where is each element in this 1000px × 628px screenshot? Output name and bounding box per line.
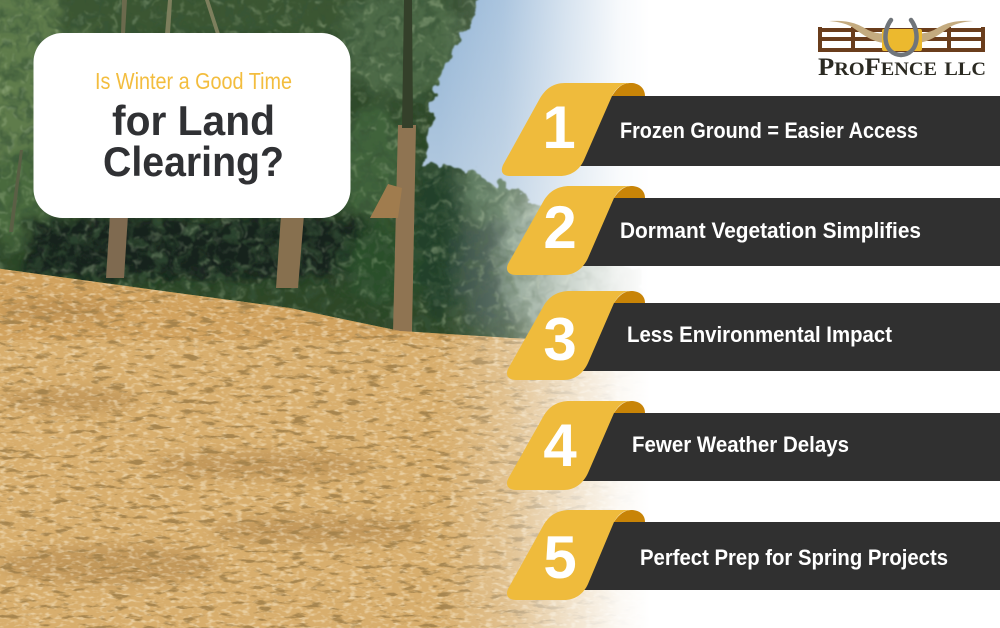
title line: subtitle: Is Winter a Good Time	[95, 68, 292, 94]
item 2 banner	[580, 198, 1000, 266]
item 5 gold tab	[507, 510, 631, 600]
item 3 number: 3	[543, 306, 577, 373]
background photo: cleared land with trees	[0, 0, 636, 628]
item 4 label: Fewer Weather Delays	[632, 432, 849, 457]
item 3 label: Less Environmental Impact	[627, 322, 893, 347]
item 3 banner	[580, 303, 1000, 371]
logo wordmark: PROFENCE LLC	[818, 54, 986, 81]
title card	[34, 33, 350, 218]
item 1 gold tab	[502, 83, 631, 176]
item 2 number: 2	[543, 194, 577, 261]
item 5: Perfect Prep	[507, 510, 1000, 600]
item 2 label: Dormant Vegetation Simplifies	[620, 218, 921, 243]
item 2 ribbon fold	[614, 186, 645, 198]
title line: Clearing?: Clearing?	[103, 138, 284, 185]
item 4 gold tab	[507, 401, 631, 490]
item 5 ribbon fold	[614, 510, 645, 522]
item 4: Fewer Weather Delays	[507, 401, 1000, 490]
title line: for Land: for Land	[112, 97, 275, 144]
sky	[0, 0, 680, 300]
item 3 gold tab	[507, 291, 631, 380]
item 1 banner	[575, 96, 1000, 166]
logo: ProFence LLC	[818, 20, 986, 81]
ground	[0, 260, 685, 628]
tree trunks	[9, 0, 416, 332]
item 1: Frozen Ground	[502, 83, 1000, 176]
item 5 label: Perfect Prep for Spring Projects	[640, 545, 948, 570]
item 5 number: 5	[543, 524, 577, 591]
logo fence	[818, 27, 985, 52]
logo horseshoe	[885, 20, 917, 55]
logo horns	[829, 21, 973, 43]
item 2 gold tab	[507, 186, 631, 275]
white fade	[440, 0, 650, 628]
item 2: Dormant Vegetation	[507, 186, 1000, 275]
item 4 banner	[580, 413, 1000, 481]
item 4 number: 4	[543, 412, 577, 479]
item 5 banner	[580, 522, 1000, 590]
item 3: Less Environmental Impact	[507, 291, 1000, 380]
item 1 label: Frozen Ground = Easier Access	[620, 118, 918, 143]
item 4 ribbon fold	[614, 401, 645, 413]
item 3 ribbon fold	[614, 291, 645, 303]
item 1 number: 1	[542, 94, 576, 161]
item 1 ribbon fold	[612, 83, 645, 96]
logo cylinder	[882, 29, 922, 51]
tree foliage	[0, 0, 660, 350]
